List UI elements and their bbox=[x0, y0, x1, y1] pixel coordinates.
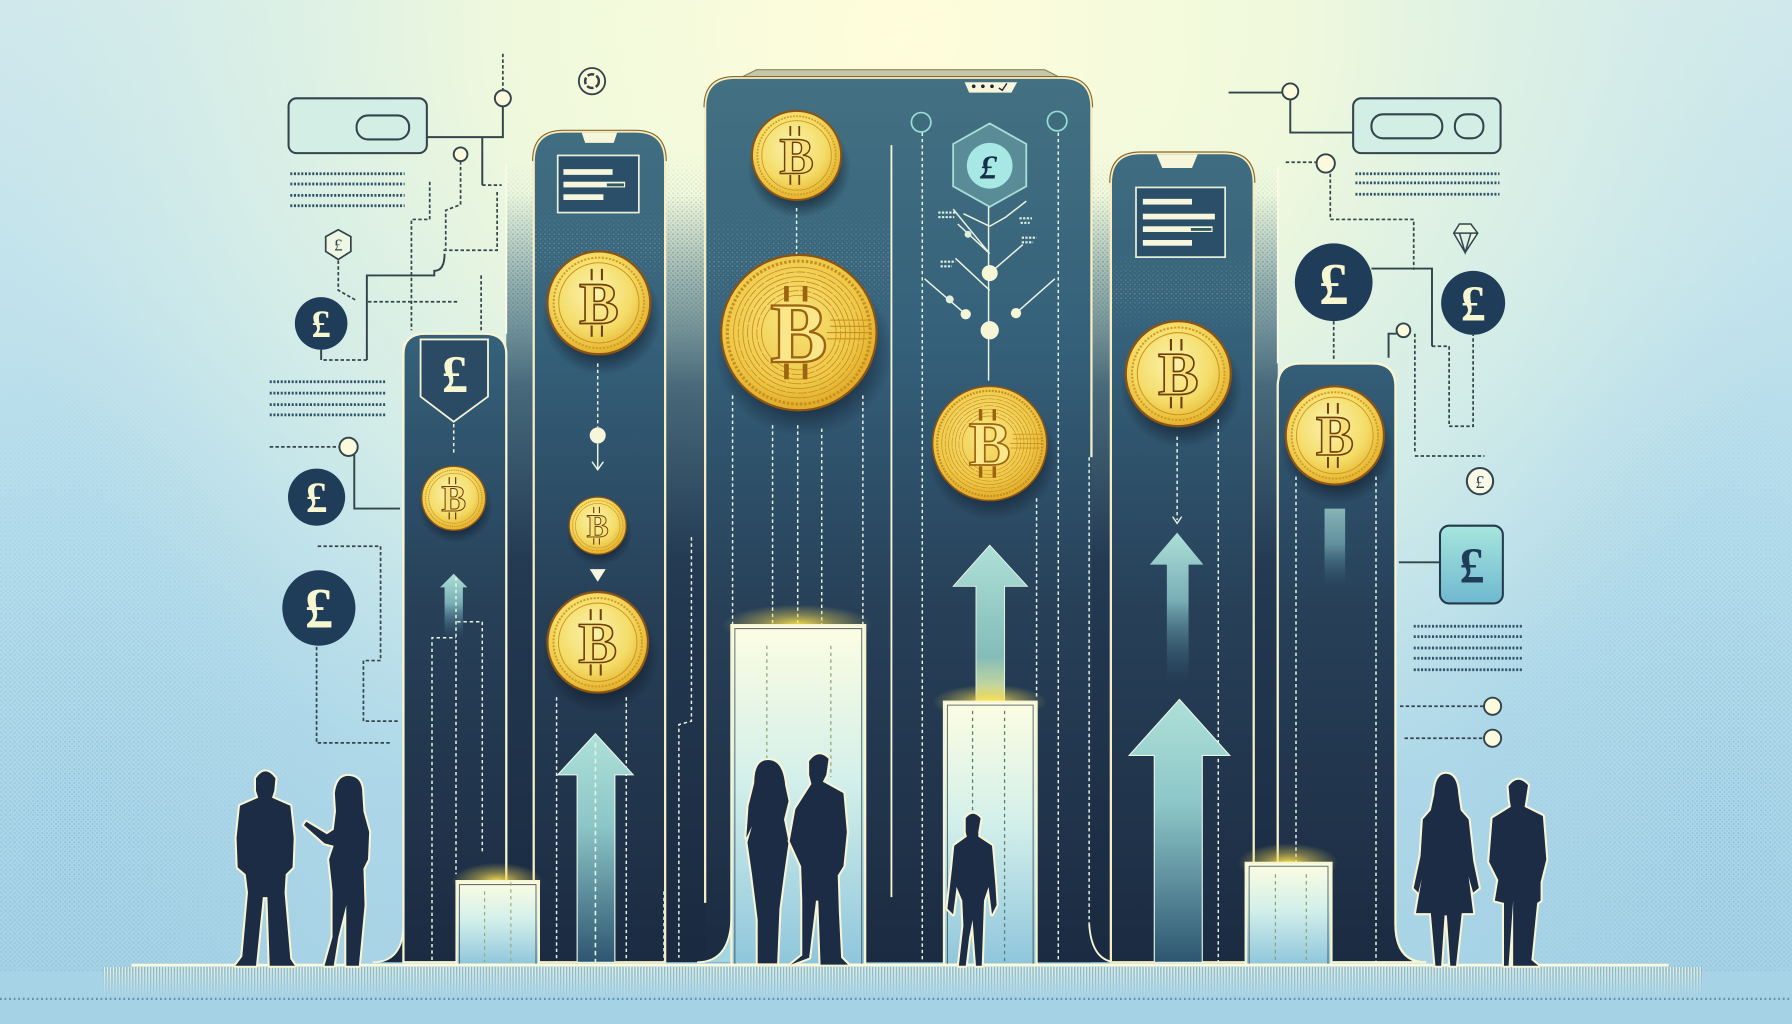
icon: pound circle upper left bbox=[295, 297, 347, 360]
arrow: lower bbox=[1129, 699, 1230, 962]
coin: second column lower bbox=[542, 592, 659, 713]
text rows: right lower bbox=[1414, 626, 1523, 670]
panel: short right column bbox=[1278, 363, 1426, 962]
coin: central top: B bbox=[779, 128, 814, 185]
bar 2 bbox=[731, 625, 865, 965]
hexagon pound icon bbox=[953, 123, 1026, 207]
panel edge: lines rising above short columns bbox=[373, 163, 1278, 962]
person: woman right in dress bbox=[1414, 774, 1479, 966]
bars: glowing columns bbox=[451, 605, 1338, 965]
icon: small circular token top bbox=[579, 68, 605, 94]
icon: pound circle middle left bbox=[288, 469, 345, 526]
text rows: left middle bbox=[270, 382, 385, 415]
person: small figure in bar bbox=[947, 814, 997, 966]
icon: hexagon coin bbox=[326, 230, 357, 301]
icon: coin token right bbox=[1467, 468, 1493, 494]
icon: pound circle large right bbox=[1295, 243, 1373, 360]
connector: right pound circuits bbox=[1371, 269, 1485, 456]
panel: central large phone bbox=[704, 70, 1093, 962]
arrow: second column bbox=[558, 734, 633, 962]
person: woman centre bbox=[746, 760, 789, 963]
icon: teal pound box: £ bbox=[1459, 538, 1485, 594]
icon: pound circle middle left: £ bbox=[306, 474, 327, 522]
tree of connectors bbox=[925, 201, 1055, 381]
arrow: faint bbox=[1325, 509, 1345, 589]
bar 1 bbox=[457, 881, 539, 965]
text rows: right upper bbox=[1355, 174, 1499, 194]
small node icons bbox=[911, 111, 1067, 132]
icon: pound circle upper left: £ bbox=[311, 303, 331, 346]
coin: central right: B bbox=[969, 409, 1011, 479]
shield icon with pound: £ bbox=[442, 346, 468, 404]
connector: node to middle pound bbox=[270, 438, 400, 509]
curve: central panel bottom corners bbox=[697, 914, 1118, 962]
coin: central large: B bbox=[770, 287, 827, 381]
icon: pound circle lower left bbox=[282, 546, 400, 743]
shield icon with pound bbox=[421, 339, 488, 422]
panel: short left column bbox=[403, 334, 506, 962]
phone notch bbox=[582, 133, 617, 143]
diagram: right top box with connectors bbox=[1229, 83, 1501, 270]
phone notch bbox=[1157, 154, 1198, 168]
icon: diamond bbox=[1454, 224, 1478, 253]
coin: right column: B bbox=[1316, 405, 1354, 468]
person: man centre bbox=[790, 754, 848, 965]
coin: second column middle: B bbox=[587, 508, 609, 545]
phone notch bbox=[965, 82, 1017, 93]
panel: second column with phone bbox=[533, 130, 666, 962]
coin: second column lower: B bbox=[578, 610, 617, 675]
icon: coin token right: £ bbox=[1475, 472, 1485, 492]
panel: fourth column with phone bbox=[1110, 152, 1255, 962]
floor bbox=[0, 965, 1792, 999]
coin: second column top: B bbox=[579, 270, 619, 336]
coin: second column top bbox=[542, 251, 662, 375]
connectors: right lower nodes bbox=[1400, 698, 1501, 747]
arrow: upper fading bbox=[1150, 533, 1203, 683]
bar 3 bbox=[944, 702, 1037, 965]
screen card bbox=[1136, 187, 1225, 257]
arrow: central bbox=[953, 545, 1027, 704]
coin: fourth column: B bbox=[1158, 342, 1199, 409]
arrow: faded small up arrow bbox=[440, 574, 467, 640]
coin: central top bbox=[748, 111, 851, 218]
icon: teal pound box bbox=[1399, 526, 1503, 603]
coin: fourth column bbox=[1120, 321, 1242, 447]
coin: small left: B bbox=[441, 479, 466, 520]
person: man left bbox=[235, 771, 295, 966]
icon: pound circle small right: £ bbox=[1461, 276, 1486, 332]
coin: central right bbox=[928, 386, 1058, 520]
person: woman left pointing bbox=[304, 776, 369, 966]
coin: central large bbox=[715, 255, 892, 437]
coin: right column bbox=[1281, 386, 1395, 504]
dark backdrop behind the panels bbox=[373, 149, 1426, 962]
person: man right bbox=[1489, 780, 1546, 966]
text rows: left upper bbox=[290, 174, 405, 206]
connector: dashes between columns bbox=[664, 537, 691, 962]
bar 4 bbox=[1246, 863, 1331, 965]
icon: pound circle large right: £ bbox=[1319, 251, 1349, 317]
coin: second column middle bbox=[566, 497, 633, 566]
screen card bbox=[558, 155, 639, 213]
diagram: left top box with connectors bbox=[289, 54, 511, 360]
icon: hexagon coin: £ bbox=[334, 235, 343, 254]
icon: pound circle small right bbox=[1441, 271, 1505, 335]
hexagon pound icon: £ bbox=[979, 148, 998, 186]
icon: pound circle lower left: £ bbox=[305, 577, 333, 640]
coin: small left bbox=[419, 466, 493, 543]
